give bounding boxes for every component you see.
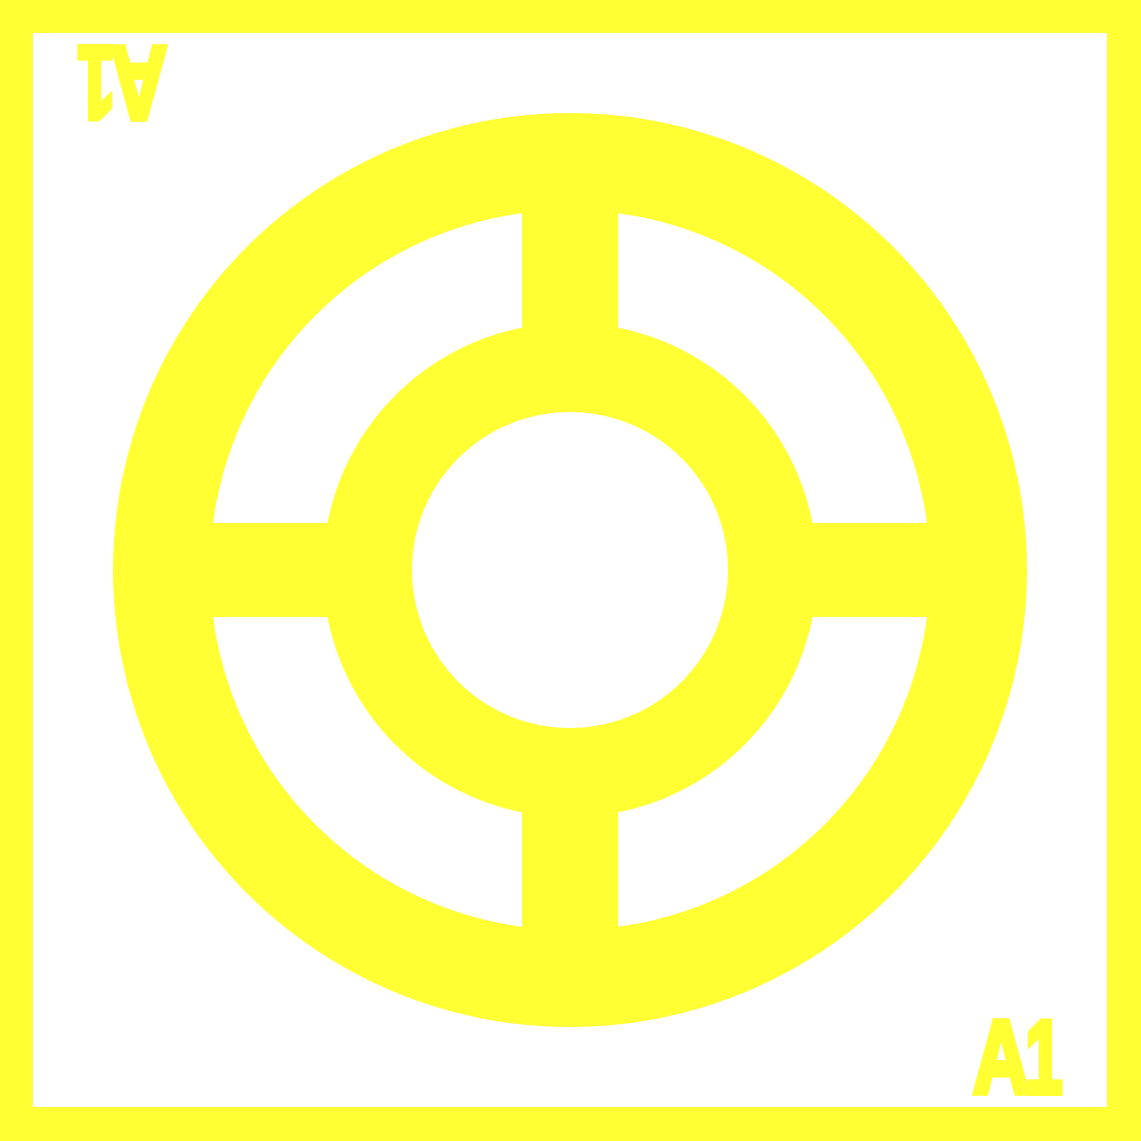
label bottom right A1 xyxy=(973,999,1063,1116)
spoke bottom xyxy=(522,810,618,940)
middle ring xyxy=(323,323,817,817)
label top left A1 rotated: 1 xyxy=(77,24,115,141)
label bottom right A1: A xyxy=(973,1000,1029,1116)
spoke right xyxy=(810,523,940,617)
label top left A1 rotated xyxy=(77,24,167,141)
lifebuoy emblem xyxy=(113,113,1027,1027)
spoke top xyxy=(522,200,618,330)
spoke left xyxy=(200,523,330,617)
label top left A1 rotated: A xyxy=(111,24,167,140)
label bottom right A1: 1 xyxy=(1025,999,1063,1116)
outer ring xyxy=(113,113,1027,1027)
